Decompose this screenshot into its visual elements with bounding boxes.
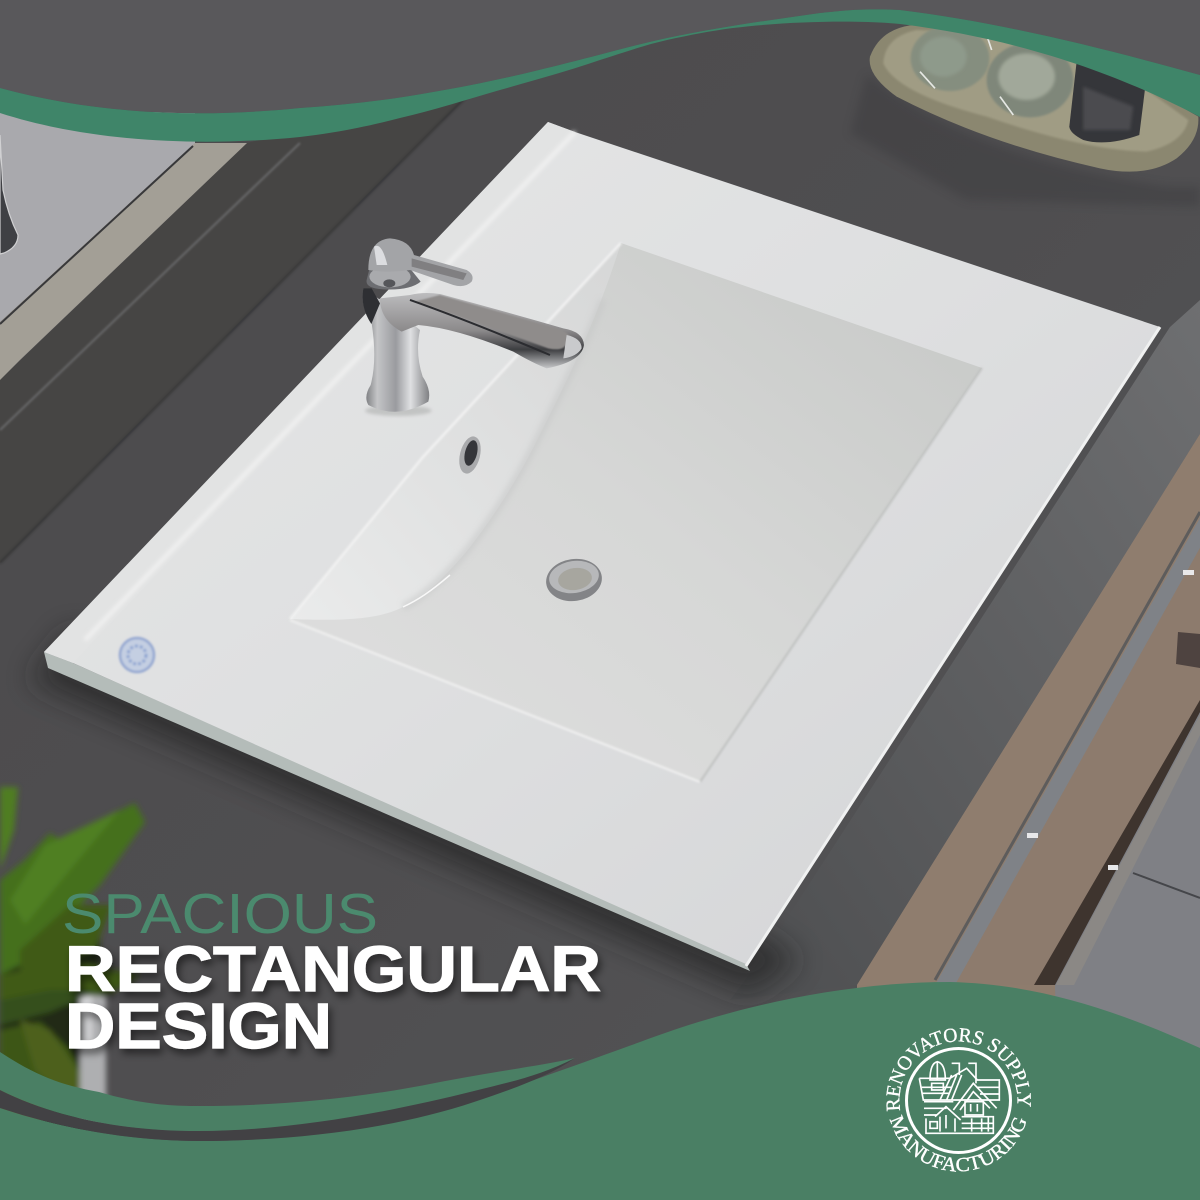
headline line 2: RECTANGULAR [65,933,601,1005]
deck crease [290,243,621,619]
logo ring [906,1048,1010,1152]
rear lip strip [44,122,575,663]
bottom dark swoosh [0,1058,575,1141]
wooden vanity and floor at right [730,300,1200,1200]
bottom wave band [0,982,1200,1200]
curved wall shade [403,300,603,607]
sink drop shadow on counter [30,630,800,995]
faucet spout [380,293,584,368]
chrome tap at far left edge [0,135,18,254]
bottom main green panel [0,982,1200,1200]
logo house [919,1062,999,1133]
tray body [870,25,1198,172]
headline [62,882,601,1062]
logo [886,1028,1031,1172]
faucet body [363,288,429,412]
faucet base shadow [365,405,432,416]
top wave dark fill [0,0,1200,113]
basin far edge shading [700,368,982,782]
glass sphere right [987,43,1073,117]
top wave band [0,0,1200,142]
tray shadow [850,73,1200,207]
faucet [363,238,584,416]
logo text top: RENOVATORS SUPPLY [886,1028,1031,1112]
logo text bottom: MANUFACTURING [889,1114,1026,1172]
overflow hole [456,434,484,476]
tray with glass objects [850,25,1200,207]
basin floor [288,243,982,782]
maker's stamp [120,638,154,672]
sink front edge [44,652,750,971]
curved wall highlight [403,575,450,607]
sink top surface [44,122,1160,964]
basin sloped wall [290,243,621,620]
back counter at upper left [0,83,480,563]
sink right edge highlight [746,327,1160,966]
faucet lever handle [368,238,473,286]
dark cup [1069,62,1145,142]
drain [543,555,605,605]
plant at lower left [0,787,145,1130]
headline line 3: DESIGN [65,990,332,1062]
headline line 1: SPACIOUS [62,882,378,946]
bottom green swoosh [0,1052,575,1131]
sink slab [44,122,1160,971]
faucet collar [367,267,421,289]
glass sphere left [911,26,989,91]
top wave green ribbon [0,9,1200,142]
